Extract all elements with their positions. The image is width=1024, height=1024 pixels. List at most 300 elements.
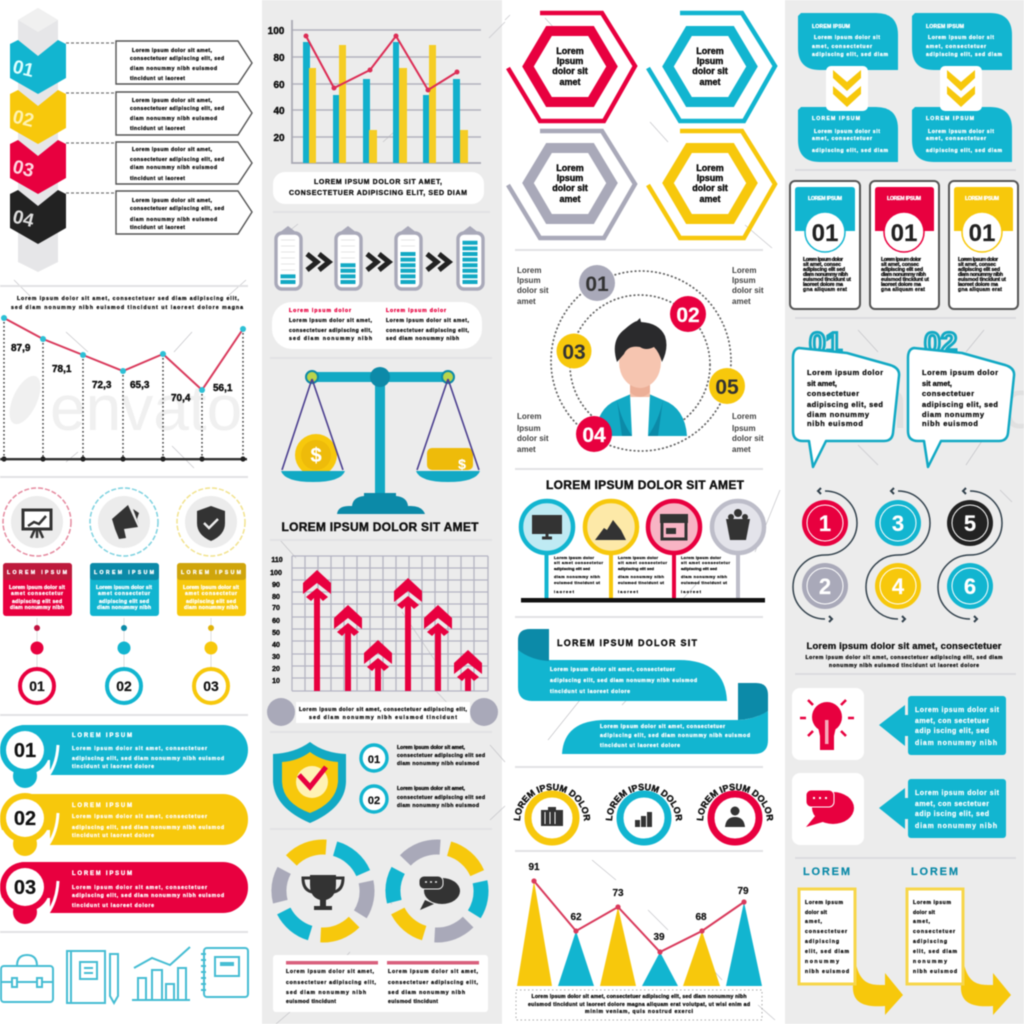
box lower right: adipiscing elit, sed diam [926, 148, 1002, 154]
label top right: dolor sit [732, 286, 764, 295]
card yellow: laoreet dolore ma [958, 282, 998, 288]
panel: arrow grid chart [267, 556, 498, 726]
lollipop cup [712, 501, 764, 553]
text block 3: sit amet consectetur [681, 560, 730, 565]
note 1: consectetuer [805, 929, 847, 935]
hexagon yellow: Ipsum [697, 173, 723, 183]
badge 05: 05 [715, 376, 739, 399]
icon: trophy [303, 875, 343, 910]
badge 01: 01 [585, 273, 609, 296]
callout 1: Lorem ipsum dolor sit [915, 707, 1000, 714]
panel: two text blocks: consectetuer adipiscing elit, [388, 980, 479, 986]
label bottom right [732, 412, 764, 454]
chart caption [273, 172, 484, 204]
red trend line [304, 34, 460, 92]
card red: amet consectetur [11, 591, 63, 597]
box top right: adipiscing elit, sed diam [926, 52, 1002, 58]
panel: hexagons [508, 13, 775, 238]
bubble 01 [793, 327, 899, 467]
note 1: elit, sed diam [805, 949, 849, 955]
caption: Lorem ipsum dolor sit amet, consectetuer adipiscing elit, sed diam [806, 655, 1003, 661]
text block 2: adipiscing elit sed [618, 566, 655, 571]
hexagon red: amet [559, 77, 581, 87]
panel: two text blocks: euismod tincidunt [388, 999, 438, 1005]
arrow box 1: diam nonummy nibh euismod [130, 66, 217, 72]
panel: battery progress [272, 226, 483, 349]
card red: sit amet, consec [881, 262, 919, 268]
arrow box 4: consectetuer adipiscing elit, sed [130, 206, 224, 212]
note 1: LOREM [803, 866, 850, 878]
card red: laoreet dolore ma [881, 282, 921, 288]
card blue: LOREM IPSUM [808, 196, 842, 202]
circle 4 [875, 563, 921, 609]
box lower left: amet, consectetuer [812, 136, 872, 142]
chart title: sed diam nonummy nibh euismod tincidunt ut laoreet dolore magna [11, 305, 243, 311]
arrow box 3: consectetuer adipiscing elit, sed [130, 157, 224, 163]
panel: number cards [790, 181, 1018, 309]
text block 2: euismod tincidunt ut [618, 580, 665, 585]
arrow box 1: Lorem ipsum dolor sit amet, [132, 48, 213, 54]
pill 03: LOREM IPSUM [72, 871, 132, 877]
card red: Lorem ipsum dolor sit [9, 585, 65, 591]
gold bar: $ [458, 456, 466, 472]
arrow box 1: tincidunt ut laoreet [130, 76, 185, 82]
circle 2 [802, 563, 848, 609]
card blue: gna aliquam erat [803, 287, 847, 293]
y labels: 40 [272, 642, 280, 649]
hexagon blue: dolor sit [692, 66, 728, 76]
bubble 01: consectetuer [807, 389, 859, 398]
note 2: elit, sed diam [913, 949, 957, 955]
lower ribbon [562, 683, 768, 754]
hexagon gray: Ipsum [557, 173, 583, 183]
pill 03: tincidunt ut laoreet dolore [72, 903, 154, 909]
battery 3 [396, 226, 421, 289]
caption banner: sed diam nonummy nibh euismod tincidunt [309, 715, 457, 721]
card blue: laoreet dolore ma [803, 282, 843, 288]
trend line [531, 878, 747, 955]
note 2: LOREM [911, 866, 958, 878]
battery caption: Lorem ipsum dolor sit amet, [289, 318, 373, 324]
panel: line chart with values [0, 296, 247, 462]
label top right: Ipsum [732, 276, 756, 285]
card blue: diam nonummy nibh [97, 605, 151, 611]
label bottom right: dolor sit [732, 434, 764, 443]
number badges [20, 669, 228, 703]
panel: two text blocks: sed diam nonummy nibh [388, 990, 465, 996]
card red: adipiscing elit sed [12, 599, 62, 605]
panel: number pills [0, 725, 248, 924]
panel: arc badges [512, 782, 774, 846]
connector lines [66, 43, 117, 193]
chevrons right [940, 66, 982, 111]
person [595, 318, 687, 436]
upper ribbon: adipiscing elit, sed diam nonummy nibh euismod [550, 678, 697, 684]
panel: outline icons [1, 947, 248, 1003]
arrow box 4: diam nonummy nibh euismod [130, 217, 217, 223]
box top left: LOREM IPSUM [812, 24, 850, 30]
stems and base [521, 552, 765, 602]
card blue: euismod tincidunt ut [803, 277, 851, 283]
arrow box 3: diam nonummy nibh euismod [130, 165, 217, 171]
pill 03 [0, 862, 248, 924]
text block 3: laoreet [681, 589, 702, 594]
panel: speech bubbles [793, 327, 1014, 467]
text block 3: adipiscing elit sed [681, 566, 718, 571]
text 01 [397, 745, 485, 767]
note 1: adipiscing [805, 939, 839, 945]
battery 2 [336, 226, 361, 289]
battery caption: consectetuer adipiscing elit, [289, 328, 373, 334]
hexagon gray [508, 131, 635, 238]
baseline [0, 456, 247, 462]
number badges: 03 [203, 678, 219, 694]
arrow box 2 [116, 92, 252, 135]
caption box: euismod tincidunt ut laoreet dolore magna aliquam erat volutpat, ut wisi enim ad [528, 1002, 750, 1008]
arrow box 1 [116, 41, 252, 84]
pill 01: 01 [14, 740, 36, 762]
note 1 [799, 866, 903, 1015]
panel: numbered circles with arrows [793, 488, 1003, 669]
panel: column 4 background [785, 0, 1024, 1024]
data line [1, 315, 246, 393]
value labels: 72,3 [92, 380, 112, 391]
battery caption: Lorem ipsum dolor sit amet, [386, 318, 470, 324]
note 1: dolor sit [805, 910, 827, 916]
battery caption [272, 302, 482, 349]
value labels: 91 [528, 862, 540, 873]
card red: gna aliquam erat [881, 287, 925, 293]
bubble 02: 02 [924, 327, 957, 360]
callout 1: adip iscing elit, sed [915, 728, 989, 735]
chevrons left [826, 66, 868, 111]
caption box: minim veniam, quis nostrud exerci [585, 1009, 694, 1015]
icon: balance scale [281, 367, 480, 514]
upper ribbon: tincidunt ut laoreet dolore [550, 689, 630, 695]
callout 1: amet, con sectetuer [915, 718, 989, 725]
panel: shield [273, 742, 485, 823]
text block 2: diam nonummy nibh [618, 574, 665, 579]
upper ribbon: Lorem ipsum dolor sit amet, consectetuer [550, 667, 675, 673]
lollipop mountain [585, 501, 637, 553]
bubble 02: adipiscing elit, sed [922, 400, 998, 409]
stack of blocks: 01 [10, 57, 36, 82]
arrow box 4: Lorem ipsum dolor sit amet, [132, 198, 213, 204]
label top right [732, 266, 764, 306]
label bottom right: Lorem [732, 412, 756, 421]
box lower left: LOREM IPSUM [812, 116, 860, 122]
bubble 02: diam nonummy [922, 410, 985, 419]
card blue: diam nonummy nibh [803, 272, 848, 278]
y labels: 80 [272, 594, 280, 601]
arrow box 4: tincidunt ut laoreet [130, 225, 185, 231]
upper ribbon: LOREM IPSUM DOLOR SIT [557, 638, 698, 648]
text block 3 [681, 555, 730, 594]
label top left: dolor sit [517, 286, 549, 295]
card yellow: 01 [969, 220, 995, 247]
caption banner: Lorem ipsum dolor sit amet, consectetuer adipiscing elit, [299, 707, 468, 713]
callout 2 [879, 779, 1006, 838]
box lower left: Lorem ipsum dolor sit [814, 129, 880, 135]
arrow box 2: tincidunt ut laoreet [130, 126, 185, 132]
text block 1: diam nonummy nibh [554, 574, 601, 579]
battery 1 [276, 226, 301, 289]
badge 01 [579, 265, 615, 301]
label bottom left: amet [517, 445, 536, 454]
y labels: 10 [272, 678, 280, 685]
badge 01: 01 [368, 754, 380, 766]
ring: trophy [261, 829, 385, 953]
y labels: 70 [272, 605, 280, 612]
panel: three icon cards [3, 488, 246, 703]
card yellow: LOREM IPSUM [181, 570, 241, 576]
text 02 [397, 786, 485, 809]
circle 6 [947, 563, 993, 609]
watermark: envato [50, 372, 242, 444]
panel: two text blocks [273, 955, 488, 1012]
note 2: Lorem ipsum [913, 900, 951, 906]
arrow box 1: consectetuer adipiscing elit, sed [130, 56, 224, 62]
icon: briefcase [1, 955, 53, 1002]
card red [3, 563, 72, 616]
badge 01 [361, 745, 387, 771]
text block 1 [554, 555, 603, 594]
y axis labels: 40 [273, 106, 285, 117]
lower ribbon: tincidunt ut laoreet dolore [600, 743, 680, 749]
pill 01: Lorem ipsum dolor sit amet, consectetuer [72, 746, 207, 752]
badge 02: 02 [676, 304, 700, 327]
label bottom right: Ipsum [732, 424, 756, 433]
panel: two text blocks: sed diam nonummy nibh [286, 990, 366, 996]
triangles [517, 881, 762, 986]
badge yellow: LOREM IPSUM DOLOR [512, 782, 591, 822]
lollipop monitor [521, 501, 573, 553]
coin [295, 434, 337, 476]
pill 01: tincidunt ut laoreet dolore [72, 764, 154, 770]
text block 2: sit amet consectetur [618, 560, 667, 565]
blue bars [303, 42, 460, 163]
hexagon red: Ipsum [557, 56, 583, 66]
y labels [270, 557, 283, 685]
card yellow: Lorem ipsum dolor [958, 257, 998, 263]
icon: chat bubbles [419, 876, 460, 910]
battery 4 [458, 226, 483, 289]
label top right: amet [732, 297, 751, 306]
panel: two text blocks: consectetuer adipiscing elit, [286, 980, 377, 986]
card yellow: sit amet, consec [958, 262, 996, 268]
upper ribbon [518, 629, 727, 701]
bubble 01: Lorem ipsum dolor [807, 368, 883, 377]
badge 04: 04 [582, 424, 606, 447]
circle 3 [875, 500, 921, 546]
badge red: LOREM IPSUM DOLOR [696, 782, 774, 822]
panel: flow boxes [798, 13, 1012, 162]
circle 3: 3 [892, 511, 904, 536]
card yellow: euismod tincidunt ut [958, 277, 1006, 283]
y axis labels [268, 26, 285, 144]
caption [806, 641, 1003, 669]
label top left [517, 266, 549, 306]
text block 1: adipiscing elit sed [554, 566, 591, 571]
callout 2: diam nonummy nibh [915, 823, 997, 830]
hexagon blue [648, 13, 775, 121]
panel: person with orbit labels [517, 265, 764, 454]
bubble 01: adipiscing elit, sed [807, 400, 883, 409]
card red: adipiscing elit sed [881, 267, 923, 273]
value labels: 79 [737, 886, 749, 897]
card yellow [949, 181, 1018, 309]
y labels: 60 [272, 618, 280, 625]
value labels: 65,3 [130, 380, 150, 391]
label top left: amet [517, 297, 536, 306]
card blue: sit amet, consec [803, 262, 841, 268]
note 1: Lorem ipsum [805, 900, 843, 906]
text block 1: sit amet consectetur [554, 560, 603, 565]
circle 4: 4 [892, 574, 905, 599]
stack of blocks: 03 [10, 157, 36, 182]
panel: isometric steps [10, 8, 252, 272]
lower ribbon: Lorem ipsum dolor sit amet, consectetuer [600, 724, 725, 730]
yellow bars [309, 45, 468, 163]
pill 01: LOREM IPSUM [72, 733, 132, 739]
arrow box 4 [116, 191, 252, 234]
hexagon gray: Lorem [556, 163, 584, 173]
card red: 01 [891, 220, 917, 247]
ring: chat [375, 829, 499, 953]
battery caption: Lorem ipsum dolor [386, 308, 446, 314]
card red: diam nonummy nibh [881, 272, 926, 278]
box top left: Lorem ipsum dolor sit [814, 35, 880, 41]
text block 2 [618, 555, 667, 594]
note 2: nonummy [913, 959, 947, 965]
card yellow: amet consectetur [185, 591, 237, 597]
bubble 01: sit amet, [807, 379, 837, 388]
gold bar [427, 448, 473, 472]
axes and grid [292, 20, 481, 163]
text block 2: laoreet [618, 589, 639, 594]
panel: two text blocks: euismod tincidunt [286, 999, 336, 1005]
arrow box 3: tincidunt ut laoreet [130, 176, 185, 182]
value labels: 39 [653, 932, 665, 943]
panel: ribbons [518, 629, 768, 754]
icon: growth chart [132, 947, 190, 1000]
circle 5 [947, 500, 993, 546]
value labels: 70,4 [171, 393, 191, 404]
icon: notebook and pencil [67, 951, 118, 1003]
heading: lollipop panel: LOREM IPSUM DOLOR SIT AMET [546, 478, 745, 492]
connector dots [30, 618, 218, 668]
value labels [528, 862, 749, 943]
box lower left: adipiscing elit, sed diam [812, 148, 888, 154]
value labels: 73 [612, 888, 624, 899]
lower ribbon: adipiscing elit, sed diam nonummy nibh euismod [600, 733, 750, 739]
card blue [90, 563, 159, 616]
callout 1 [879, 696, 1006, 755]
hexagon yellow: Lorem [696, 163, 724, 173]
badge 05 [709, 368, 745, 404]
label top left: Lorem [517, 266, 541, 275]
arrow box 3: Lorem ipsum dolor sit amet, [132, 147, 213, 153]
card red: LOREM IPSUM [887, 196, 921, 202]
chart caption: LOREM IPSUM DOLOR SIT AMET, [314, 179, 442, 186]
box top right: LOREM IPSUM [926, 24, 964, 30]
text 01: diam nonummy nibh euismod [397, 761, 479, 767]
battery caption: Lorem ipsum dolor [289, 308, 351, 314]
box top left: adipiscing elit, sed diam [812, 52, 888, 58]
card yellow: diam nonummy nibh [184, 605, 238, 611]
value labels: 87,9 [11, 343, 31, 354]
badge 04 [576, 416, 612, 452]
label bottom left: Ipsum [517, 424, 541, 433]
box lower right: Lorem ipsum dolor sit [928, 129, 994, 135]
label top right: Lorem [732, 266, 756, 275]
bubble 01: nibh euismod [807, 419, 863, 428]
text 01: Lorem ipsum dolor sit amet, [397, 745, 466, 751]
chart title: Lorem ipsum dolor sit amet, consectetuer sed diam adipiscing elit, [17, 296, 240, 302]
hexagon blue: amet [699, 77, 721, 87]
note 1: nonummy [805, 959, 839, 965]
text block 1: euismod tincidunt ut [554, 580, 601, 585]
text block 3: euismod tincidunt ut [681, 580, 728, 585]
bubble 01: diam nonummy [807, 410, 870, 419]
orbit rings [551, 271, 731, 451]
hexagon blue: Ipsum [697, 56, 723, 66]
circle 5: 5 [964, 511, 976, 536]
note 1: nibh euismod [805, 969, 849, 975]
red arrow heads [303, 570, 482, 685]
value labels: 56,1 [213, 383, 233, 394]
pill 01 [0, 725, 248, 788]
arrow box 2: diam nonummy nibh euismod [130, 116, 217, 122]
label bottom right: amet [732, 445, 751, 454]
badge 02 [361, 786, 387, 812]
hexagon gray: amet [559, 194, 581, 204]
label bottom left [517, 412, 549, 454]
badge 03: 03 [562, 341, 586, 364]
card red: euismod tincidunt ut [881, 277, 929, 283]
card blue: 01 [812, 220, 838, 247]
heading: arrows chart: LOREM IPSUM DOLOR SIT AMET [282, 520, 479, 534]
pill 02 [0, 793, 248, 856]
text 02: consectetuer adipiscing elit sed [397, 795, 485, 801]
note 2: dolor sit [913, 910, 935, 916]
badge red [696, 782, 774, 846]
hexagon blue: Lorem [696, 46, 724, 56]
text 02: Lorem ipsum dolor sit amet, [397, 786, 466, 792]
card blue: LOREM IPSUM [94, 570, 154, 576]
card blue: adipiscing elit sed [803, 267, 845, 273]
pill 02: Lorem ipsum dolor sit amet, consectetuer [72, 814, 207, 820]
y axis labels: 80 [273, 53, 285, 64]
battery caption: sed diam nonummy nibh [289, 336, 372, 342]
circle 6: 6 [964, 574, 976, 599]
card yellow: LOREM IPSUM [965, 196, 999, 202]
number badges: 02 [116, 678, 132, 694]
panel: lollipop icons [521, 501, 765, 602]
bubble 02 [908, 327, 1014, 467]
caption: nonummy nibh euismod tincidunt ut laoreet dolore [829, 663, 979, 669]
arrow box 2: Lorem ipsum dolor sit amet, [132, 98, 213, 104]
box lower left [798, 107, 898, 162]
bubble 02: sit amet, [922, 379, 952, 388]
box top right [912, 13, 1012, 70]
grid [292, 556, 488, 691]
pill 01: adipiscing elit, sed diam nonummy nibh euismod [72, 756, 224, 762]
text 01: consectetuer adipiscing elit sed [397, 753, 485, 759]
hexagon red: Lorem [556, 46, 584, 56]
stack of blocks: 04 [10, 207, 36, 232]
pill 03: adipiscing elit, sed diam nonummy nibh euismod [72, 893, 224, 899]
